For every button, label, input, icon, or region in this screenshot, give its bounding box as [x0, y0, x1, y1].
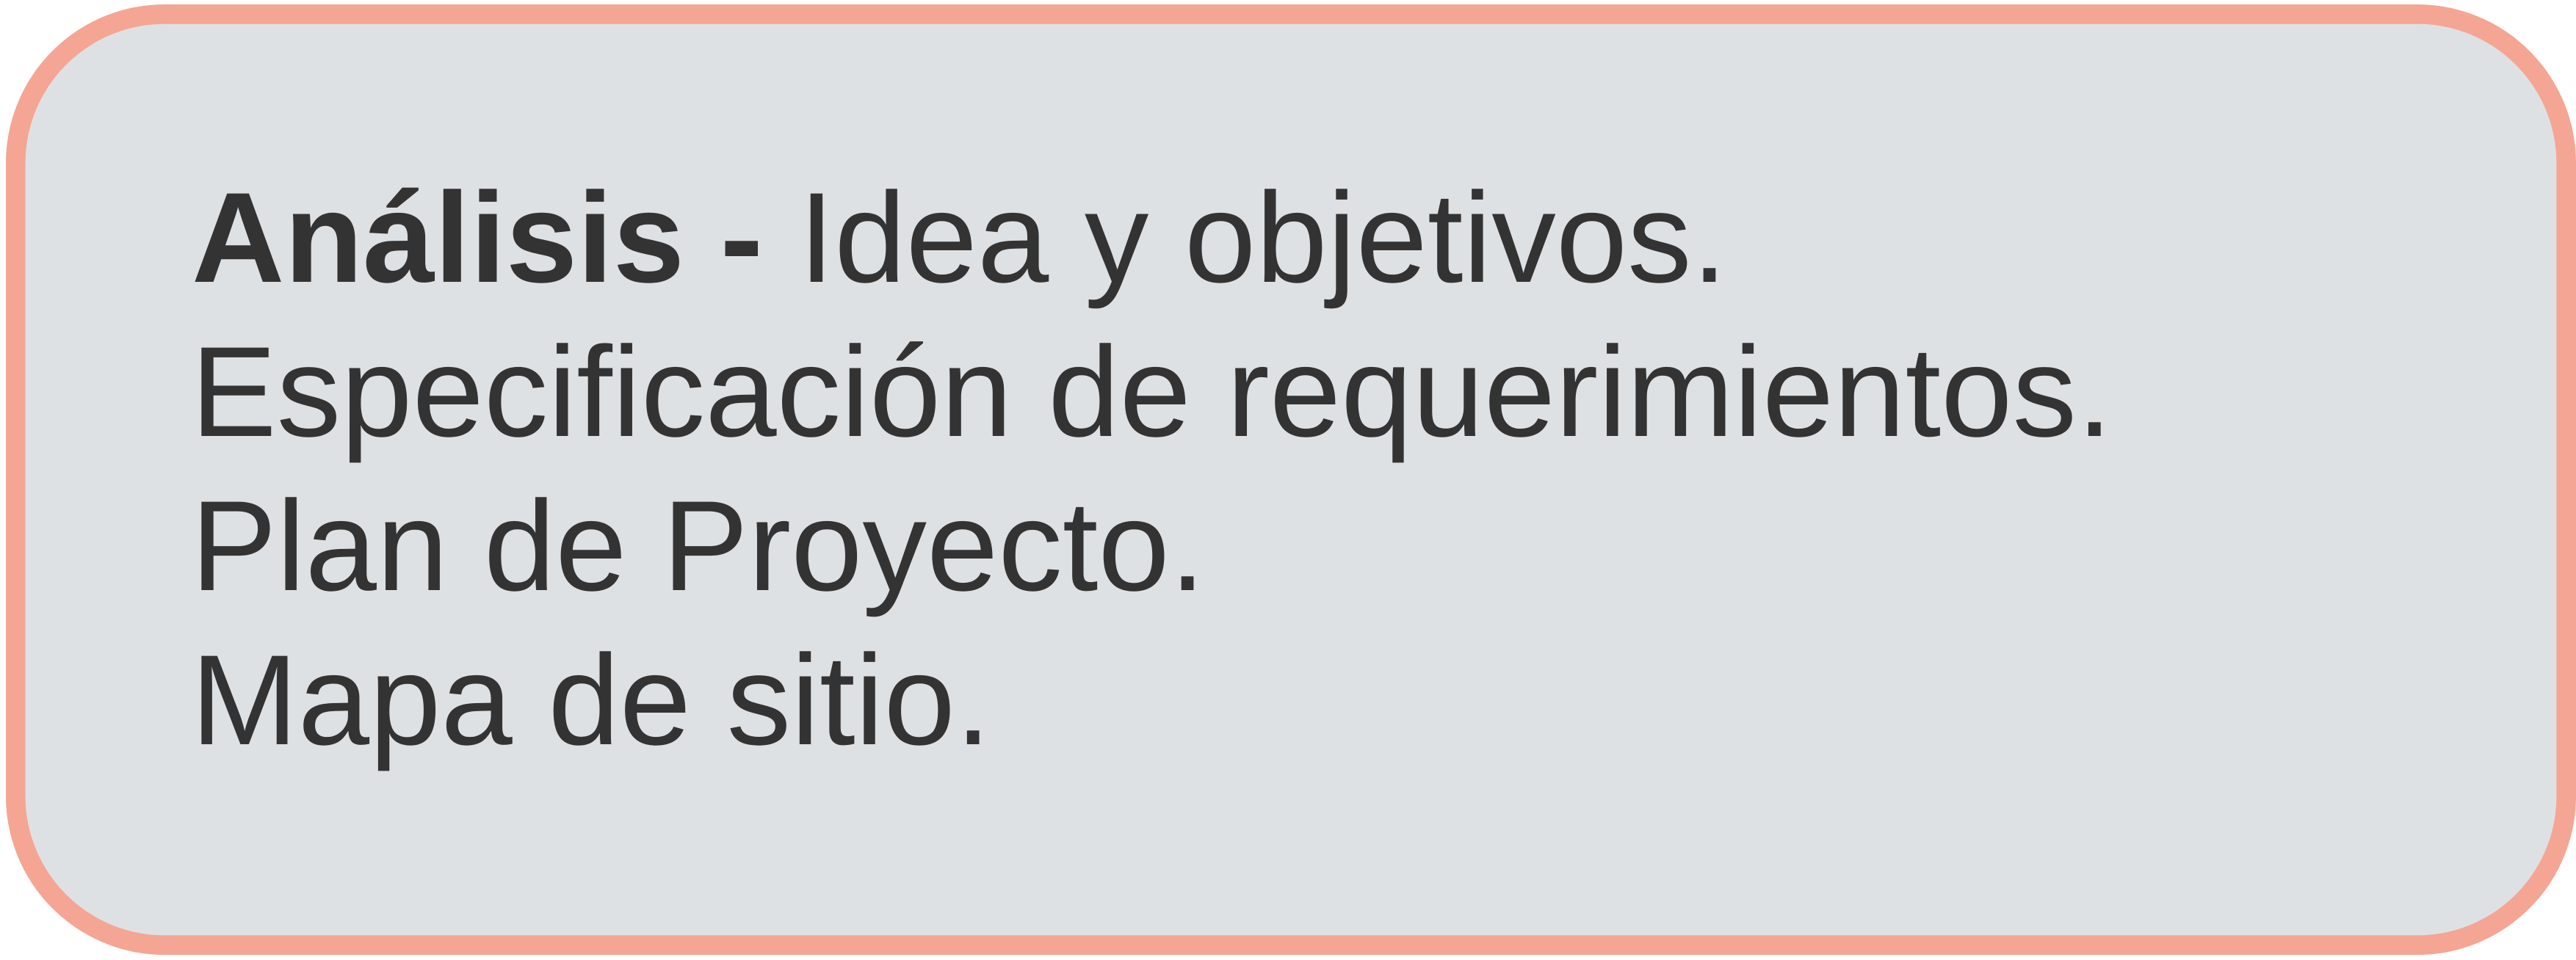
line: especificación de requerimientos: Especificación de requerimientos.	[191, 321, 2113, 464]
line: idea y objetivos: Análisis - Idea y objetivos.	[192, 167, 1727, 310]
line: plan de proyecto: Plan de Proyecto.	[191, 475, 1205, 618]
text block: analysis items	[191, 167, 2113, 772]
line: mapa de sitio: Mapa de sitio.	[191, 629, 991, 772]
